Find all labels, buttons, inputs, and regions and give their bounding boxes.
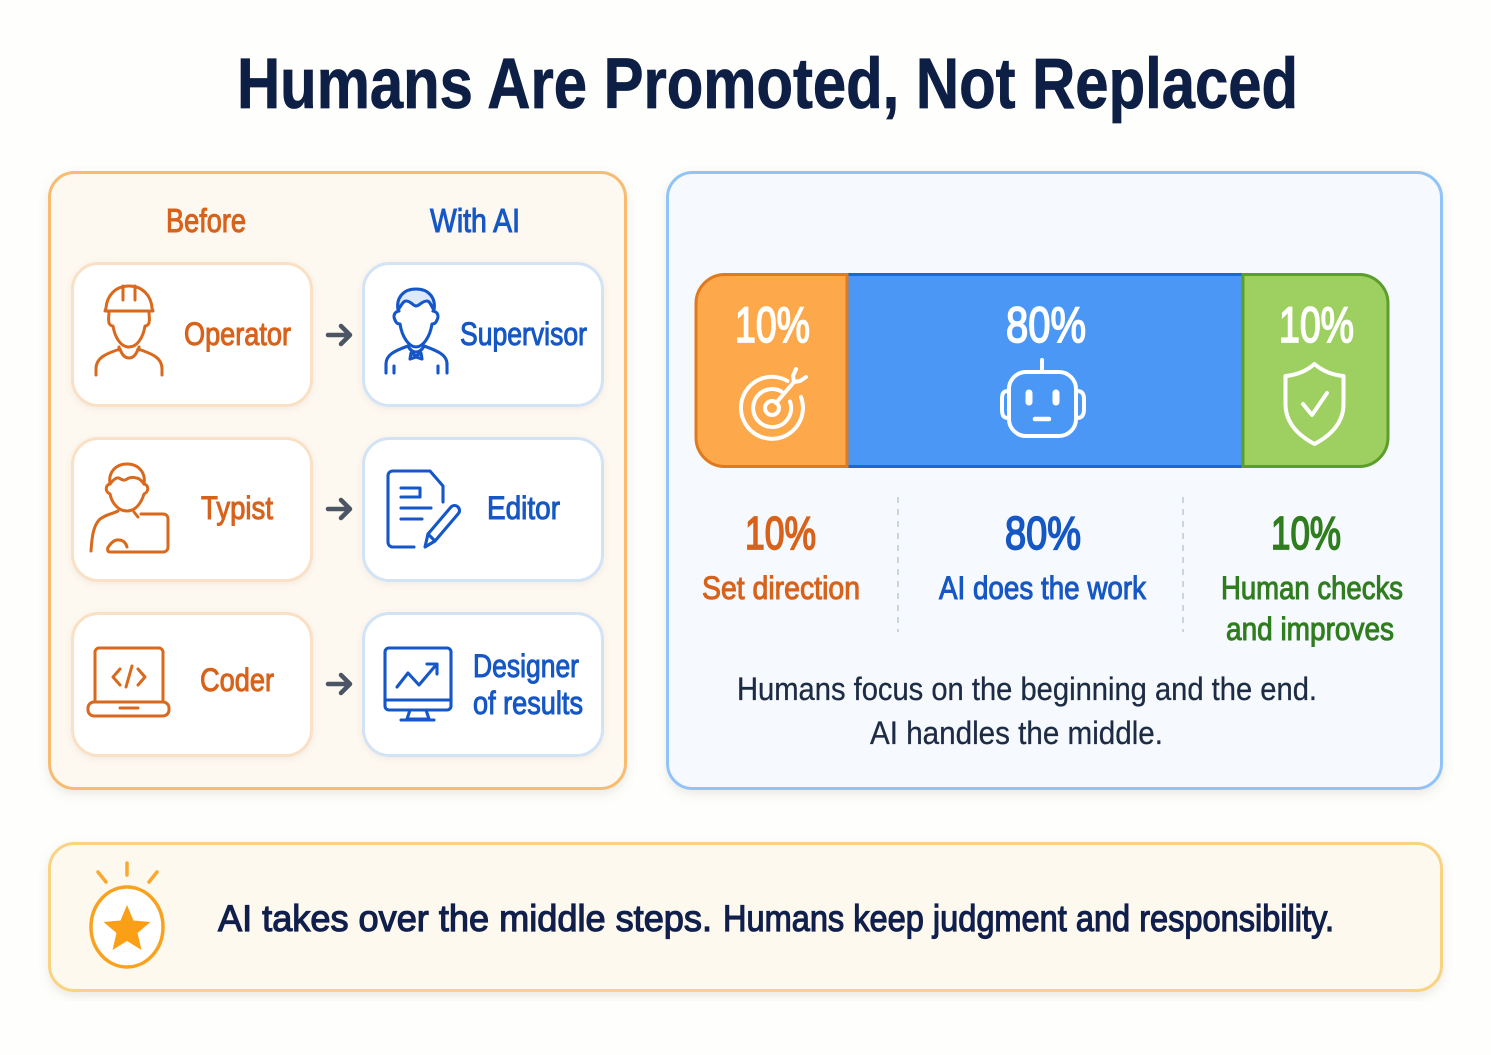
stat: human checks and improves: Human checks xyxy=(1221,570,1403,606)
label: editor: Editor xyxy=(487,490,560,526)
icon: target xyxy=(741,369,806,439)
icon: star badge with rays xyxy=(91,863,163,967)
icon: robot xyxy=(1002,360,1084,436)
card: typist xyxy=(72,438,312,580)
label: coder: Coder xyxy=(200,662,274,698)
card: supervisor xyxy=(364,264,602,406)
icon: shield with check xyxy=(1286,364,1344,444)
label: supervisor: Supervisor xyxy=(460,316,587,352)
takeaway text xyxy=(218,898,1334,939)
icon: worker with helmet xyxy=(96,286,162,375)
icon: document and pencil xyxy=(388,471,460,547)
label: typist: Typist xyxy=(201,490,273,526)
icon: monitor with rising chart xyxy=(385,648,451,720)
stat: set direction xyxy=(702,507,860,606)
stat: human checks and improves xyxy=(1221,507,1403,647)
summary text: AI handles the middle. xyxy=(870,715,1163,751)
stat: AI does the work: 80% xyxy=(1005,507,1081,559)
stacked bar chart xyxy=(695,273,1389,468)
label: designer of results xyxy=(473,648,583,721)
arrow: coder to designer xyxy=(328,675,350,693)
stat: set direction: Set direction xyxy=(702,570,860,606)
panel: bottom takeaway xyxy=(50,844,1442,990)
heading: before: Before xyxy=(166,202,246,239)
icon: laptop with code xyxy=(88,648,169,716)
summary text xyxy=(737,671,1317,751)
stat: AI does the work xyxy=(939,507,1147,606)
segment value: 10% orange: 10% xyxy=(735,297,810,353)
segment value: 80% blue: 80% xyxy=(1006,297,1086,353)
panel: 10-80-10 split xyxy=(668,172,1442,788)
stat: set direction: 10% xyxy=(745,507,816,559)
stat: human checks and improves: 10% xyxy=(1271,507,1341,559)
summary text: Humans focus on the beginning and the end. xyxy=(737,671,1317,707)
heading: with AI: With AI xyxy=(430,202,520,239)
stat: AI does the work: AI does the work xyxy=(939,570,1147,606)
card: operator xyxy=(72,264,312,406)
arrow: operator to supervisor xyxy=(328,326,350,344)
takeaway text: AI takes over the middle steps. xyxy=(218,898,712,939)
label: designer of results: Designer xyxy=(473,648,579,684)
title: Humans Are Promoted, Not Replaced xyxy=(237,45,1298,124)
arrow: typist to editor xyxy=(328,500,350,518)
takeaway text: Humans keep judgment and responsibility. xyxy=(723,898,1334,939)
card: editor xyxy=(364,438,602,580)
icon: supervisor person xyxy=(386,289,447,373)
label: operator: Operator xyxy=(184,316,291,352)
label: designer of results: of results xyxy=(473,685,583,721)
icon: person at laptop xyxy=(91,464,168,552)
panel: before and with AI roles xyxy=(50,172,626,788)
card: designer of results xyxy=(364,614,602,756)
stat: human checks and improves: and improves xyxy=(1226,611,1394,647)
segment value: 10% green: 10% xyxy=(1279,297,1354,353)
card: coder xyxy=(72,614,312,756)
